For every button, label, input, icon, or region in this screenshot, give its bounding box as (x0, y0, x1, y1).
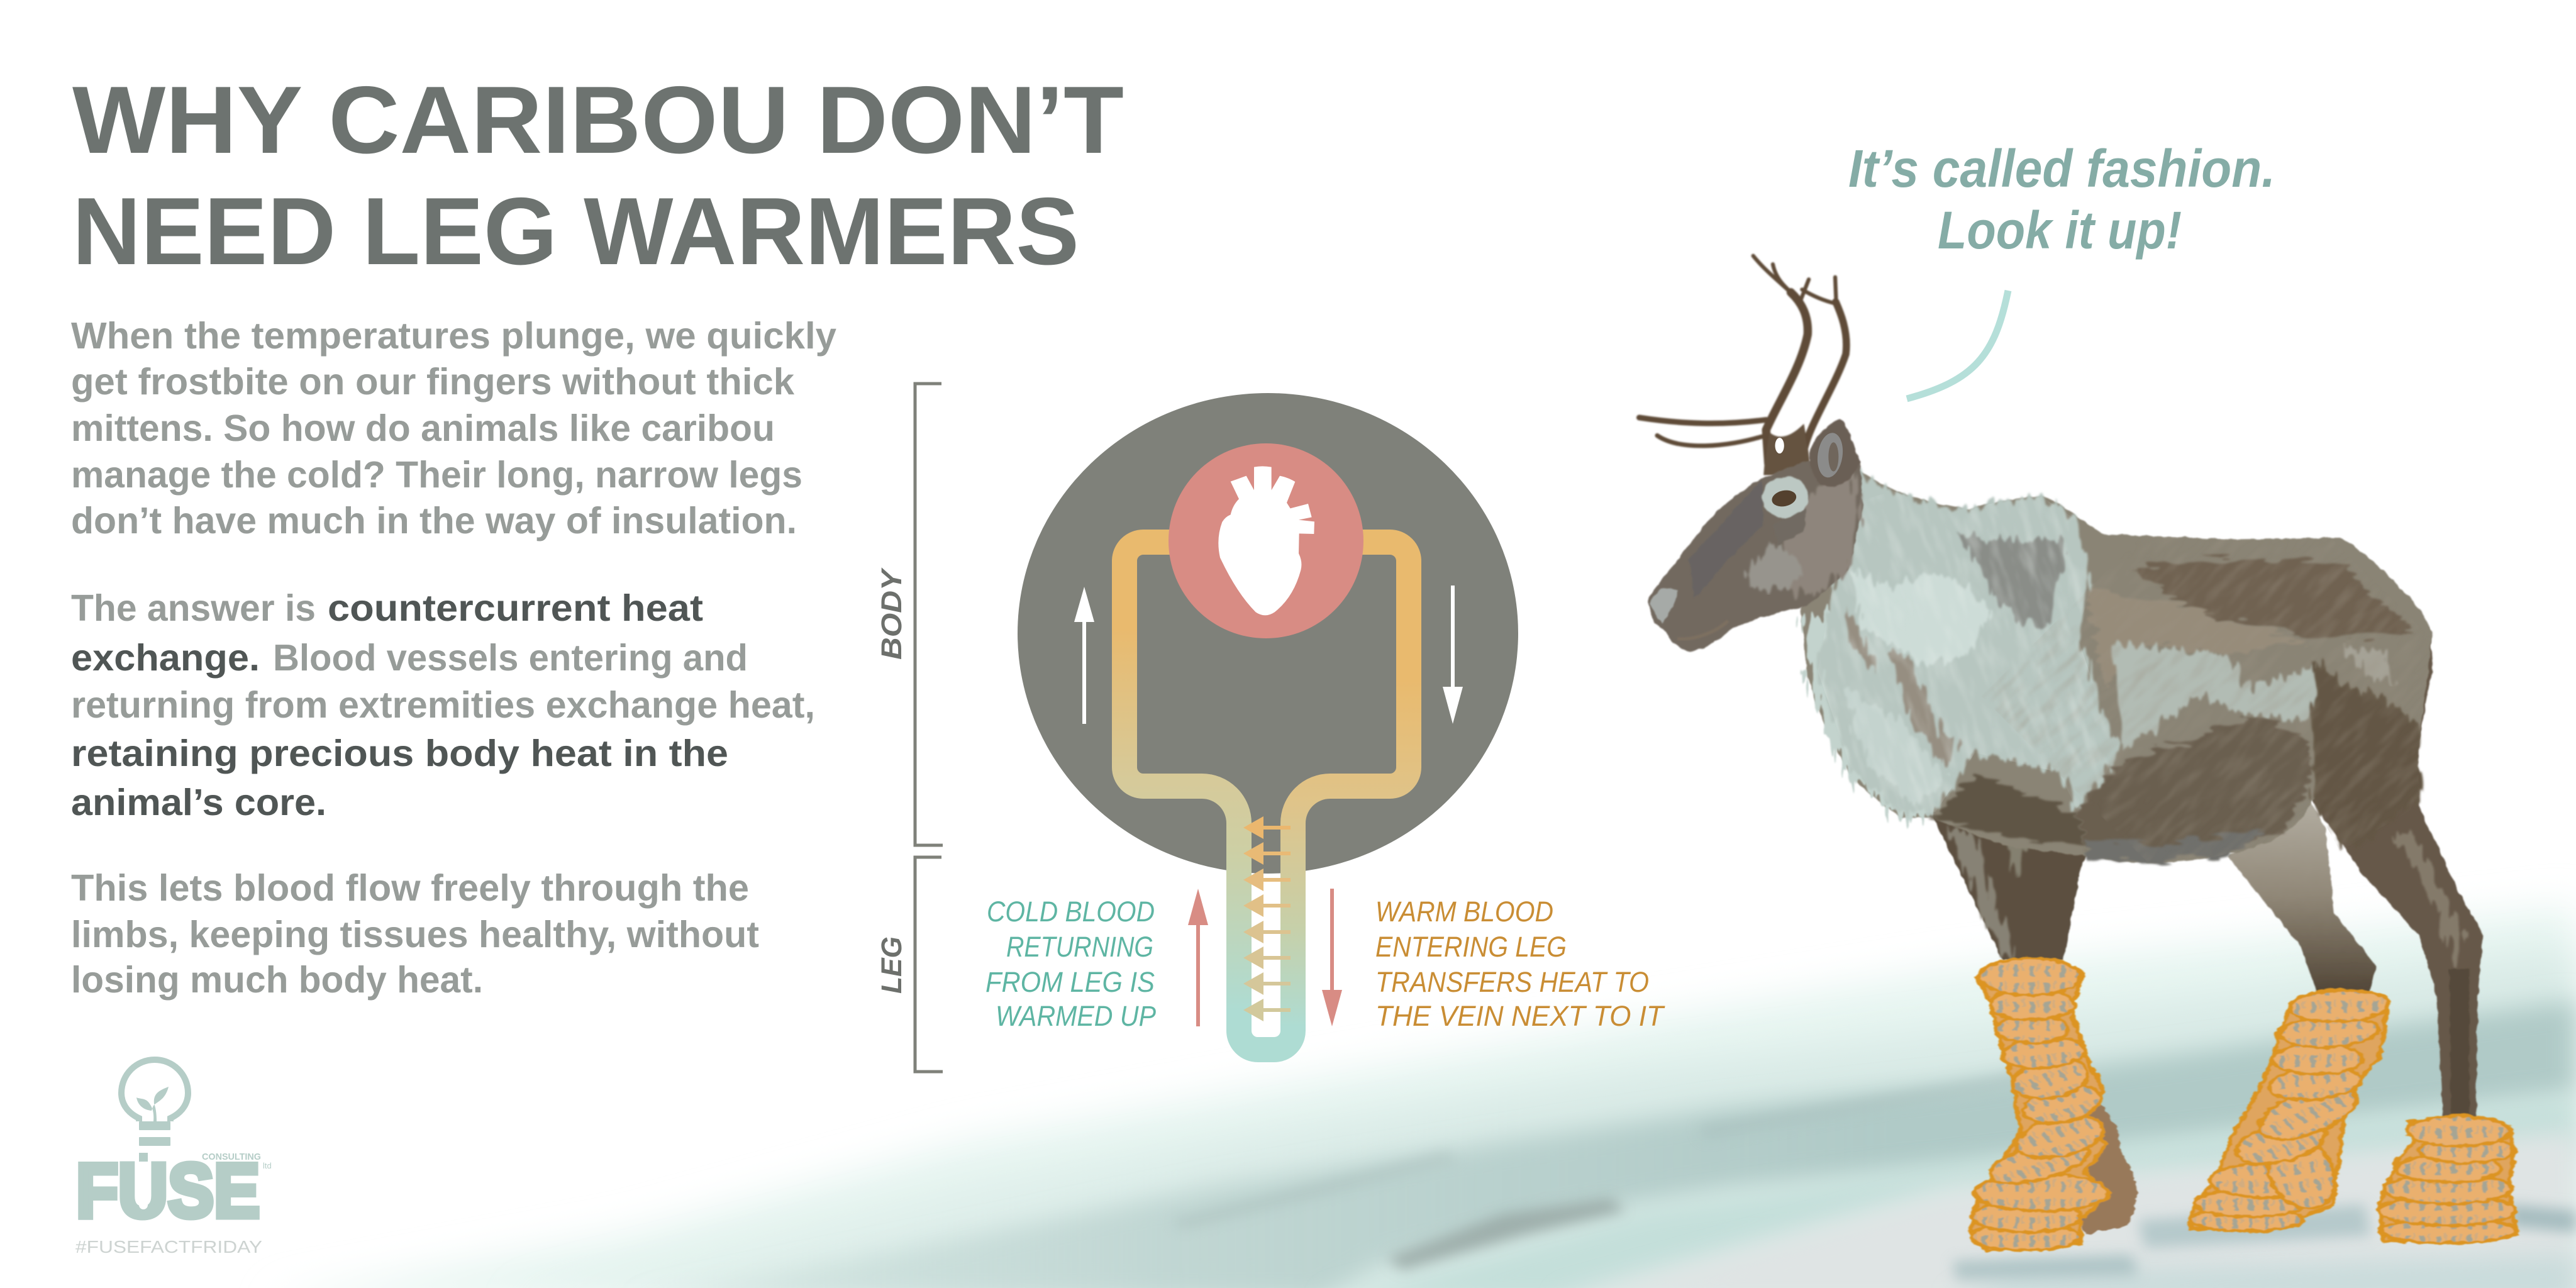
hind leg highlight (2390, 834, 2467, 963)
leg warmer: middle (2190, 988, 2390, 1231)
speech text: Look it up! (1938, 201, 2182, 260)
filament slit (139, 1162, 148, 1209)
icon: heart (1218, 466, 1314, 615)
mouth line (1677, 621, 1728, 639)
hashtag: #FUSEFACTFRIDAY (75, 1237, 262, 1257)
torso painterly dark strokes (1996, 536, 2421, 862)
arrow: pink down (1322, 889, 1342, 1026)
far hind leg (2228, 795, 2377, 997)
mane painterly light strokes (1823, 492, 2102, 812)
vessel: returning vein (1124, 542, 1267, 1050)
text block: intro paragraph: mittens. So how do animals like caribou (71, 408, 775, 449)
mane lower highlight (1846, 688, 1947, 806)
vessel: entering artery (1265, 542, 1409, 1050)
title: NEED LEG WARMERS (72, 178, 1079, 285)
front leg mid highlight (2003, 829, 2037, 874)
text block: closing paragraph: losing much body heat. (71, 959, 483, 1001)
label: cold blood: COLD BLOOD (987, 896, 1155, 928)
shoulder gray patch (1958, 536, 2065, 626)
wordmark: FUSE (76, 1148, 260, 1233)
text block: closing paragraph: This lets blood flow freely through the (71, 867, 749, 909)
leg warmers (1970, 958, 2518, 1251)
text block: countercurrent paragraph: retaining precious body heat in the (71, 733, 728, 774)
speech text (1848, 139, 2275, 260)
belly dark (2076, 716, 2312, 854)
antler gap (1775, 438, 1784, 453)
thigh shadow (2312, 660, 2419, 851)
text block: countercurrent paragraph: exchange. (71, 637, 260, 679)
leg warmer: front (1970, 958, 2114, 1251)
mane highlight (1852, 570, 1992, 666)
ear core (1828, 442, 1838, 472)
label: body: BODY (875, 567, 908, 660)
text block: intro paragraph: don’t have much in the way of insulation. (71, 500, 797, 541)
label: cold blood: WARMED UP (996, 1000, 1156, 1032)
thigh light (2340, 646, 2394, 682)
icon: light bulb with sprout (121, 1060, 188, 1162)
speech tail (1907, 291, 2008, 399)
ear inner (1815, 431, 1845, 479)
consulting text: CONSULTING (202, 1152, 261, 1162)
back mid tone (2087, 587, 2306, 688)
bracket: body (915, 384, 943, 845)
text block: countercurrent paragraph: animal’s core. (71, 782, 326, 823)
mane and shoulder (1818, 472, 2118, 814)
label: leg: LEG (875, 936, 908, 994)
hind leg dark core (2450, 969, 2469, 1138)
label: cold blood: RETURNING (1006, 931, 1153, 963)
text block: countercurrent paragraph: returning from extremities exchange heat, (71, 684, 815, 726)
label: warm blood (1375, 896, 1665, 1032)
chest dark (1933, 775, 2087, 848)
text block: intro paragraph: get frostbite on our fingers without thick (71, 361, 794, 402)
face cheek light (1748, 542, 1807, 590)
snout gray (1689, 480, 1763, 598)
bracket: leg (915, 857, 943, 1072)
front leg highlight (1947, 829, 2014, 958)
leg warmer: far left back layer (2072, 1099, 2136, 1235)
front leg (1930, 789, 2093, 960)
arrow: down in body (1443, 586, 1463, 724)
eye (1770, 488, 1798, 509)
arrow: up in body (1074, 587, 1094, 724)
ear (1807, 419, 1860, 486)
eye patch (1762, 477, 1809, 518)
text block: countercurrent paragraph: The answer is (71, 587, 316, 629)
torso (1801, 469, 2433, 863)
mane fringe hair (1804, 598, 1947, 820)
muzzle light (1650, 588, 1679, 624)
under eye dark (1773, 509, 1807, 545)
text block: intro paragraph: When the temperatures plunge, we quickly (71, 315, 836, 357)
label: warm blood: TRANSFERS HEAT TO (1375, 966, 1649, 998)
arrow: pink up (1188, 889, 1208, 1026)
head (1648, 419, 1863, 651)
title (72, 67, 1124, 285)
text block: countercurrent paragraph: Blood vessels entering and (273, 637, 748, 679)
label: warm blood: ENTERING LEG (1375, 931, 1567, 963)
heart circle (1169, 443, 1363, 638)
near hind leg (2312, 626, 2483, 1138)
neck brown (1773, 464, 1863, 598)
diagram: countercurrent heat exchange (875, 384, 1665, 1072)
back brown patch (2132, 559, 2416, 638)
label: cold blood (985, 896, 1156, 1032)
text block: intro paragraph: manage the cold? Their long, narrow legs (71, 454, 802, 496)
snowy ground background (264, 906, 2576, 1288)
belly gray lower edge (2087, 829, 2267, 863)
antlers (1639, 256, 1846, 475)
title: WHY CARIBOU DON’T (72, 67, 1124, 174)
label: warm blood: WARM BLOOD (1375, 896, 1553, 928)
caribou illustration (1639, 256, 2538, 1138)
ruff brown streaks (1846, 609, 1958, 767)
heat transfer arrows (1243, 816, 1291, 1021)
text block: countercurrent paragraph: countercurrent heat (328, 587, 703, 629)
text block: intro paragraph (71, 315, 836, 541)
text block: countercurrent paragraph (71, 587, 815, 823)
body circle (1018, 393, 1518, 874)
label: cold blood: FROM LEG IS (985, 966, 1155, 998)
label: warm blood: THE VEIN NEXT TO IT (1375, 1000, 1665, 1032)
logo: Fuse Consulting (75, 1060, 272, 1257)
ltd text: ltd (263, 1161, 272, 1170)
text block: closing paragraph (71, 867, 759, 1001)
flank light patches (2116, 643, 2320, 745)
text block: closing paragraph: limbs, keeping tissues healthy, without (71, 914, 759, 955)
leg warmer: hind (2379, 1116, 2518, 1243)
speech text: It’s called fashion. (1848, 139, 2275, 198)
